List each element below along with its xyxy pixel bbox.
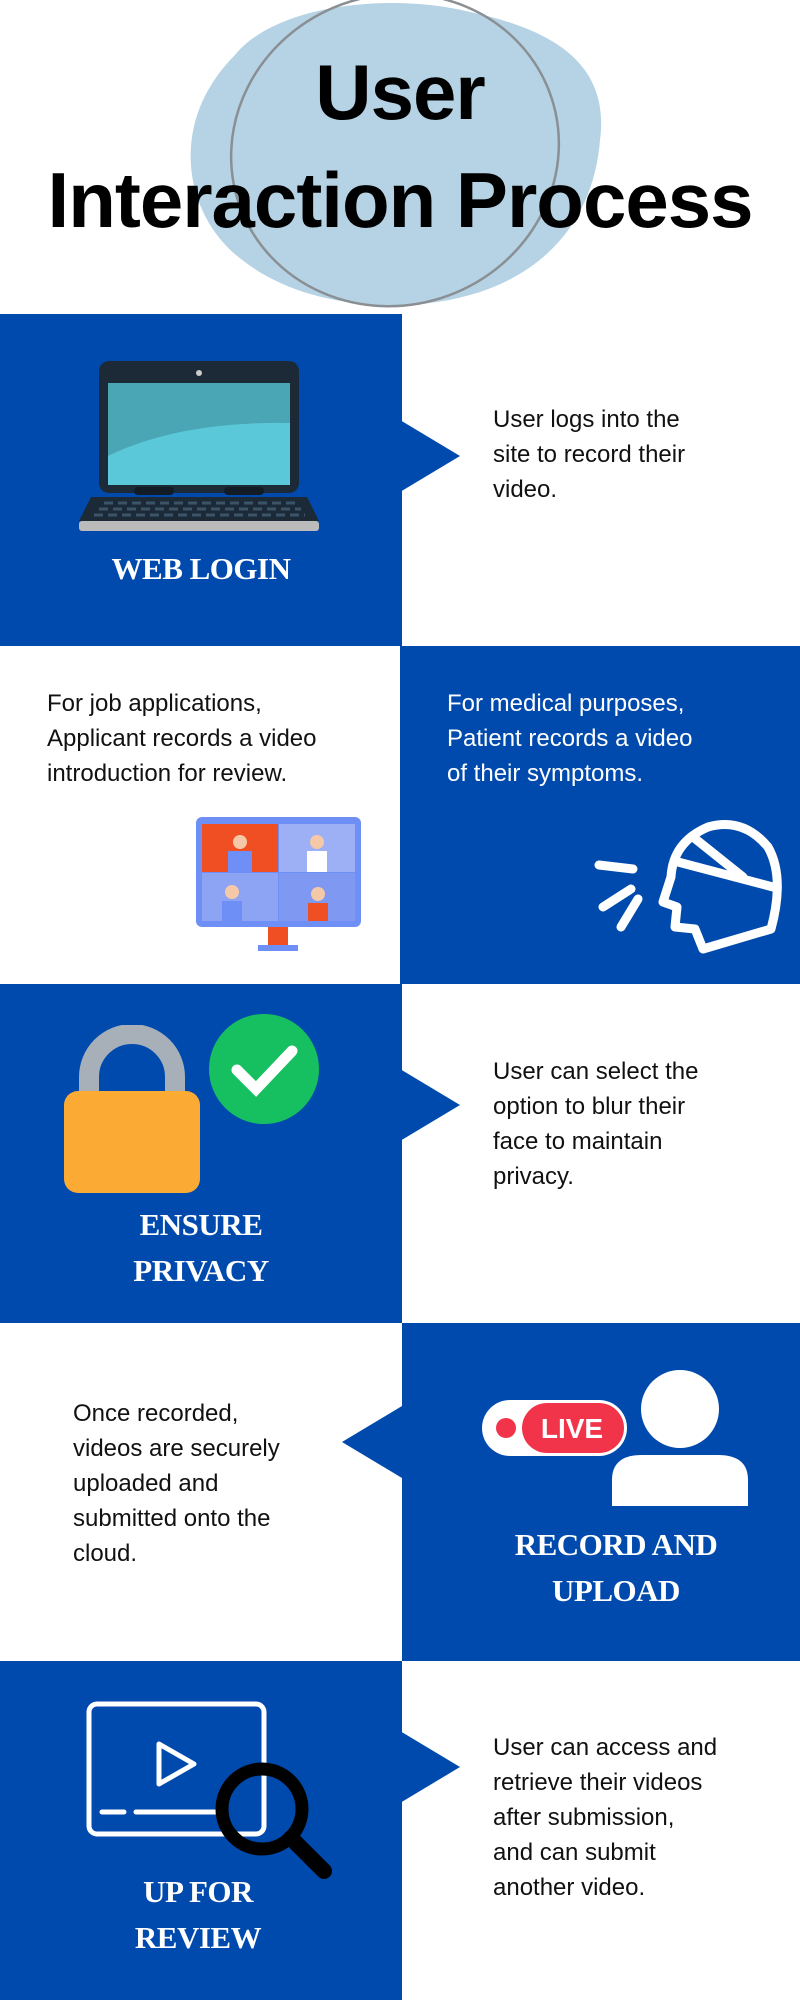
text 5: and can submit bbox=[493, 1839, 656, 1866]
arrow 1 bbox=[402, 421, 460, 491]
text 5: retrieve their videos bbox=[493, 1769, 702, 1796]
text 4: Once recorded, bbox=[73, 1400, 238, 1427]
text 1: site to record their bbox=[493, 441, 685, 468]
text 5: User can access and bbox=[493, 1734, 717, 1761]
text: job applications bbox=[47, 690, 316, 787]
icon: live: LIVE bbox=[541, 1413, 603, 1444]
text: job applications: For job applications, bbox=[47, 690, 262, 717]
arrow 4 bbox=[342, 1406, 402, 1478]
heading: ensure privacy: PRIVACY bbox=[133, 1253, 269, 1288]
icon: video call monitor bbox=[196, 817, 361, 951]
panel: medical bbox=[400, 646, 800, 984]
heading: ensure privacy: ENSURE bbox=[140, 1207, 262, 1242]
arrow 3 bbox=[402, 1070, 460, 1140]
text: job applications: introduction for review. bbox=[47, 760, 287, 787]
text 1 bbox=[493, 406, 685, 503]
panel: record and upload bbox=[402, 1323, 800, 1661]
icon: lock bbox=[64, 1025, 200, 1193]
icon: live bbox=[482, 1400, 627, 1456]
icon: laptop bbox=[79, 361, 319, 531]
icon: video review bbox=[86, 1702, 332, 1879]
text: medical: For medical purposes, bbox=[447, 690, 684, 717]
title blob bbox=[190, 0, 602, 308]
title bbox=[48, 48, 752, 244]
heading: web login: WEB LOGIN bbox=[112, 551, 290, 586]
text: medical: of their symptoms. bbox=[447, 760, 643, 787]
text 5: after submission, bbox=[493, 1804, 674, 1831]
heading: record and upload: RECORD AND bbox=[515, 1527, 717, 1562]
arrow 5 bbox=[402, 1732, 460, 1802]
heading: record and upload: UPLOAD bbox=[552, 1573, 680, 1608]
text 3 bbox=[493, 1058, 698, 1190]
heading: up for review: UP FOR bbox=[143, 1874, 253, 1909]
text 3: privacy. bbox=[493, 1163, 574, 1190]
text 3: face to maintain bbox=[493, 1128, 662, 1155]
text: medical bbox=[447, 690, 692, 787]
title: Interaction Process bbox=[48, 156, 752, 244]
heading: up for review bbox=[135, 1874, 262, 1955]
title: User bbox=[315, 48, 485, 136]
text 1: User logs into the bbox=[493, 406, 680, 433]
panel: web login bbox=[0, 314, 402, 646]
text 5: another video. bbox=[493, 1874, 645, 1901]
icon: head bbox=[594, 820, 782, 954]
text 4: submitted onto the bbox=[73, 1505, 270, 1532]
text: medical: Patient records a video bbox=[447, 725, 692, 752]
text 3: option to blur their bbox=[493, 1093, 685, 1120]
heading: record and upload bbox=[515, 1527, 717, 1608]
text 4: videos are securely bbox=[73, 1435, 280, 1462]
text 5 bbox=[493, 1734, 717, 1901]
heading: up for review: REVIEW bbox=[135, 1920, 261, 1955]
icon: check bbox=[209, 1014, 319, 1124]
text 4: uploaded and bbox=[73, 1470, 218, 1497]
panel: ensure privacy bbox=[0, 984, 402, 1323]
text 1: video. bbox=[493, 476, 557, 503]
text: job applications: Applicant records a video bbox=[47, 725, 316, 752]
text 4 bbox=[73, 1400, 280, 1567]
text 3: User can select the bbox=[493, 1058, 698, 1085]
heading: ensure privacy bbox=[133, 1207, 269, 1288]
text 4: cloud. bbox=[73, 1540, 137, 1567]
panel: up for review bbox=[0, 1661, 402, 2000]
icon: person bbox=[612, 1370, 748, 1506]
